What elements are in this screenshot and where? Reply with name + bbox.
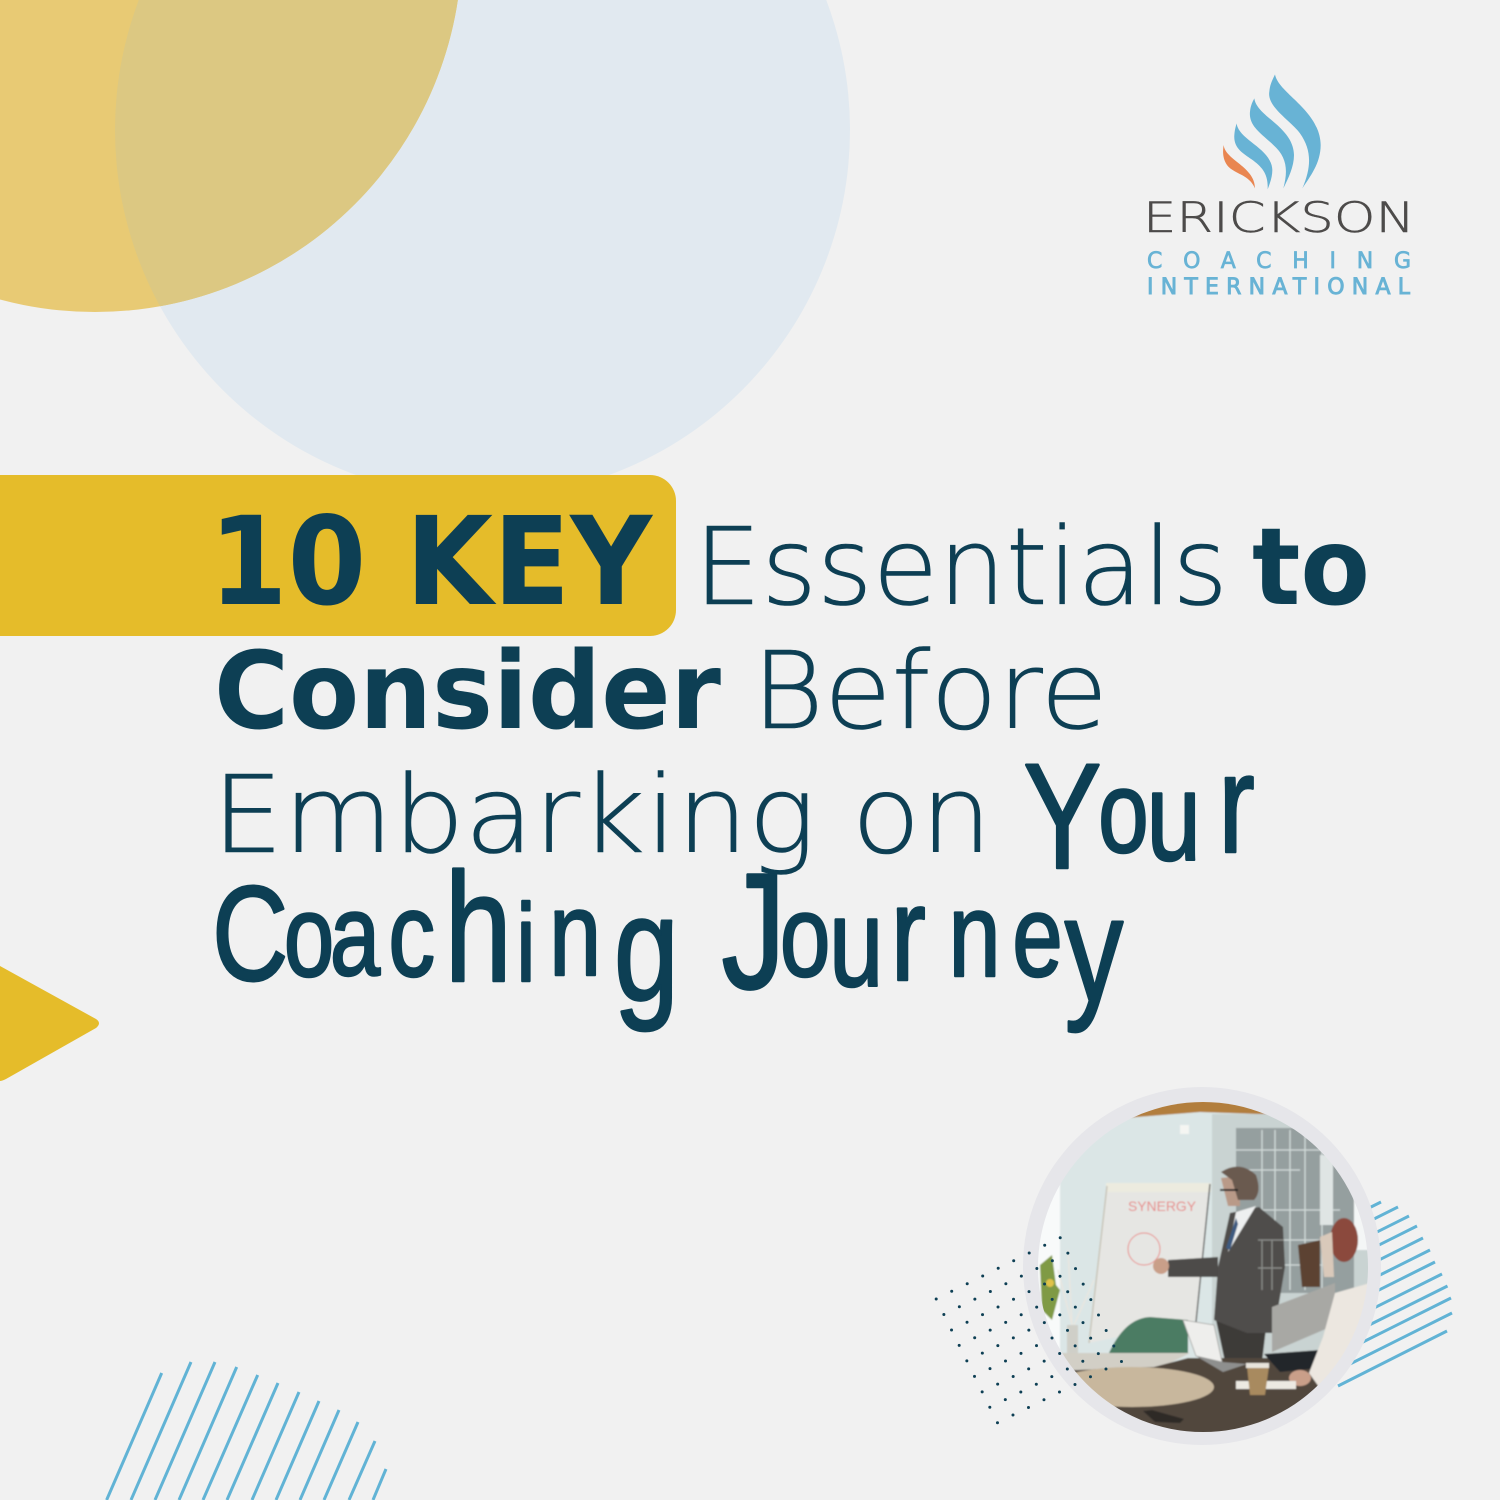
reflection [1272,1283,1335,1352]
decorative pale blue circle [115,0,850,498]
table [1074,1357,1318,1432]
green chair [1109,1317,1188,1353]
photo ring [1023,1087,1381,1445]
seated woman [1264,1240,1320,1372]
man's head [1220,1167,1259,1206]
title line 3: Embarking on: Embarking on [212,754,992,878]
light table oval [1076,1366,1215,1408]
wall [1059,1111,1248,1363]
title [209,491,1370,878]
handwritten title: Your: Y [1023,732,1101,900]
handwritten title: Coaching Journey: n [948,868,1001,1002]
front woman head [1320,1218,1358,1277]
window [1038,1184,1060,1350]
handwritten title: Your: o [1098,748,1149,878]
handwritten title: Coaching Journey: i [516,882,535,1004]
phone [1143,1410,1184,1423]
logo wordmark: ERICKSON: ERICKSON [1143,193,1415,242]
flipchart writing: SYNERGY [1128,1198,1197,1214]
wood ceiling [1132,1102,1266,1118]
handwritten title: Coaching Journey: a [330,871,380,1001]
icon: flame mark [1223,74,1321,189]
handwritten title: Coaching Journey: r [891,857,926,1009]
title line 2: Consider: Consider [214,630,721,754]
title line 1: to: to [1252,506,1370,630]
front woman shirt [1309,1283,1370,1387]
handwritten title: Coaching Journey: o [780,872,830,1002]
reflection lines on suit [1258,1240,1284,1290]
title line 1: Essentials: Essentials [694,506,1228,630]
glass panel grid [1212,1114,1382,1360]
man's suit [1214,1207,1285,1333]
handwritten title: Coaching Journey: y [1065,865,1123,1033]
yellow title banner [0,475,676,636]
handwritten title: Your: u [1147,747,1201,887]
photo: coach presenting at a flipchart in a meeting room [1030,1100,1382,1440]
wall sconce [1180,1125,1189,1134]
handwritten title: Coaching Journey: e [1012,872,1063,1002]
handwritten title: Coaching Journey: h [445,842,512,1014]
handwritten title: Coaching Journey: J [721,840,786,1024]
handwritten title: Your: r [1218,725,1255,882]
laptop [1183,1320,1247,1372]
paper under coffee [1236,1381,1296,1389]
striped accent bottom left [107,1362,386,1500]
shirt and tie [1228,1206,1256,1252]
handwritten title: Coaching Journey: n [549,867,601,1001]
flipchart [1089,1183,1211,1343]
plant [1040,1250,1094,1353]
man's legs [1216,1320,1267,1362]
title line 2: Before: Before [752,630,1108,754]
man's arm [1168,1257,1218,1277]
handwritten title: Coaching Journey: u [829,873,883,1013]
striped accent behind photo [1261,1202,1452,1386]
dot pattern [935,1236,1123,1424]
handwritten title: Coaching Journey: g [614,864,679,1032]
yellow triangle accent [0,966,99,1081]
logo wordmark: COACHING: COACHING [1147,249,1411,274]
handwritten title: Coaching Journey: o [284,872,334,1002]
logo: Erickson Coaching International [1143,74,1415,300]
handwritten title: Coaching Journey: c [388,868,435,1002]
title line 1: 10 KEY: 10 KEY [209,491,654,633]
decorative yellow circle [0,0,458,312]
coffee cup [1246,1363,1269,1395]
handwritten title: Coaching Journey: C [212,857,288,1009]
man's hand [1153,1258,1169,1274]
hands [1289,1370,1311,1386]
logo wordmark: INTERNATIONAL: INTERNATIONAL [1147,275,1411,300]
stone table section [1062,1352,1189,1371]
